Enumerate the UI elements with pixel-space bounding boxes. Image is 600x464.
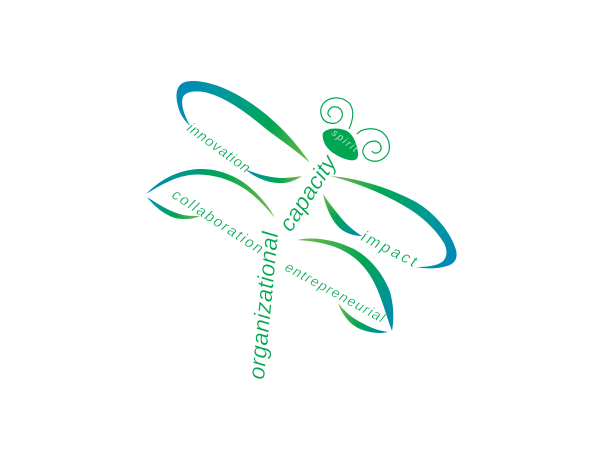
antenna: right xyxy=(357,129,389,161)
label: impact: impact xyxy=(358,228,420,271)
wing: lower right (entrepreneurial) xyxy=(297,238,393,331)
label: spirit: spirit xyxy=(329,128,361,156)
label: entrepreneurial: entrepreneurial xyxy=(283,259,389,326)
wing: small lower right xyxy=(338,303,388,333)
body label: organizational: organizational xyxy=(243,230,283,380)
wing: upper left (innovation) xyxy=(176,81,310,163)
wing: small left xyxy=(147,197,200,219)
body label: capacity: capacity xyxy=(273,149,342,236)
antenna: left xyxy=(321,98,353,129)
wing: left (collaboration) xyxy=(146,169,275,218)
label: collaboration: collaboration xyxy=(169,186,266,258)
wing: small upper left xyxy=(245,169,302,183)
label: innovation: innovation xyxy=(184,120,253,177)
wing: small right xyxy=(323,194,362,236)
head with label xyxy=(323,128,361,160)
wing: right (impact) xyxy=(330,176,457,268)
